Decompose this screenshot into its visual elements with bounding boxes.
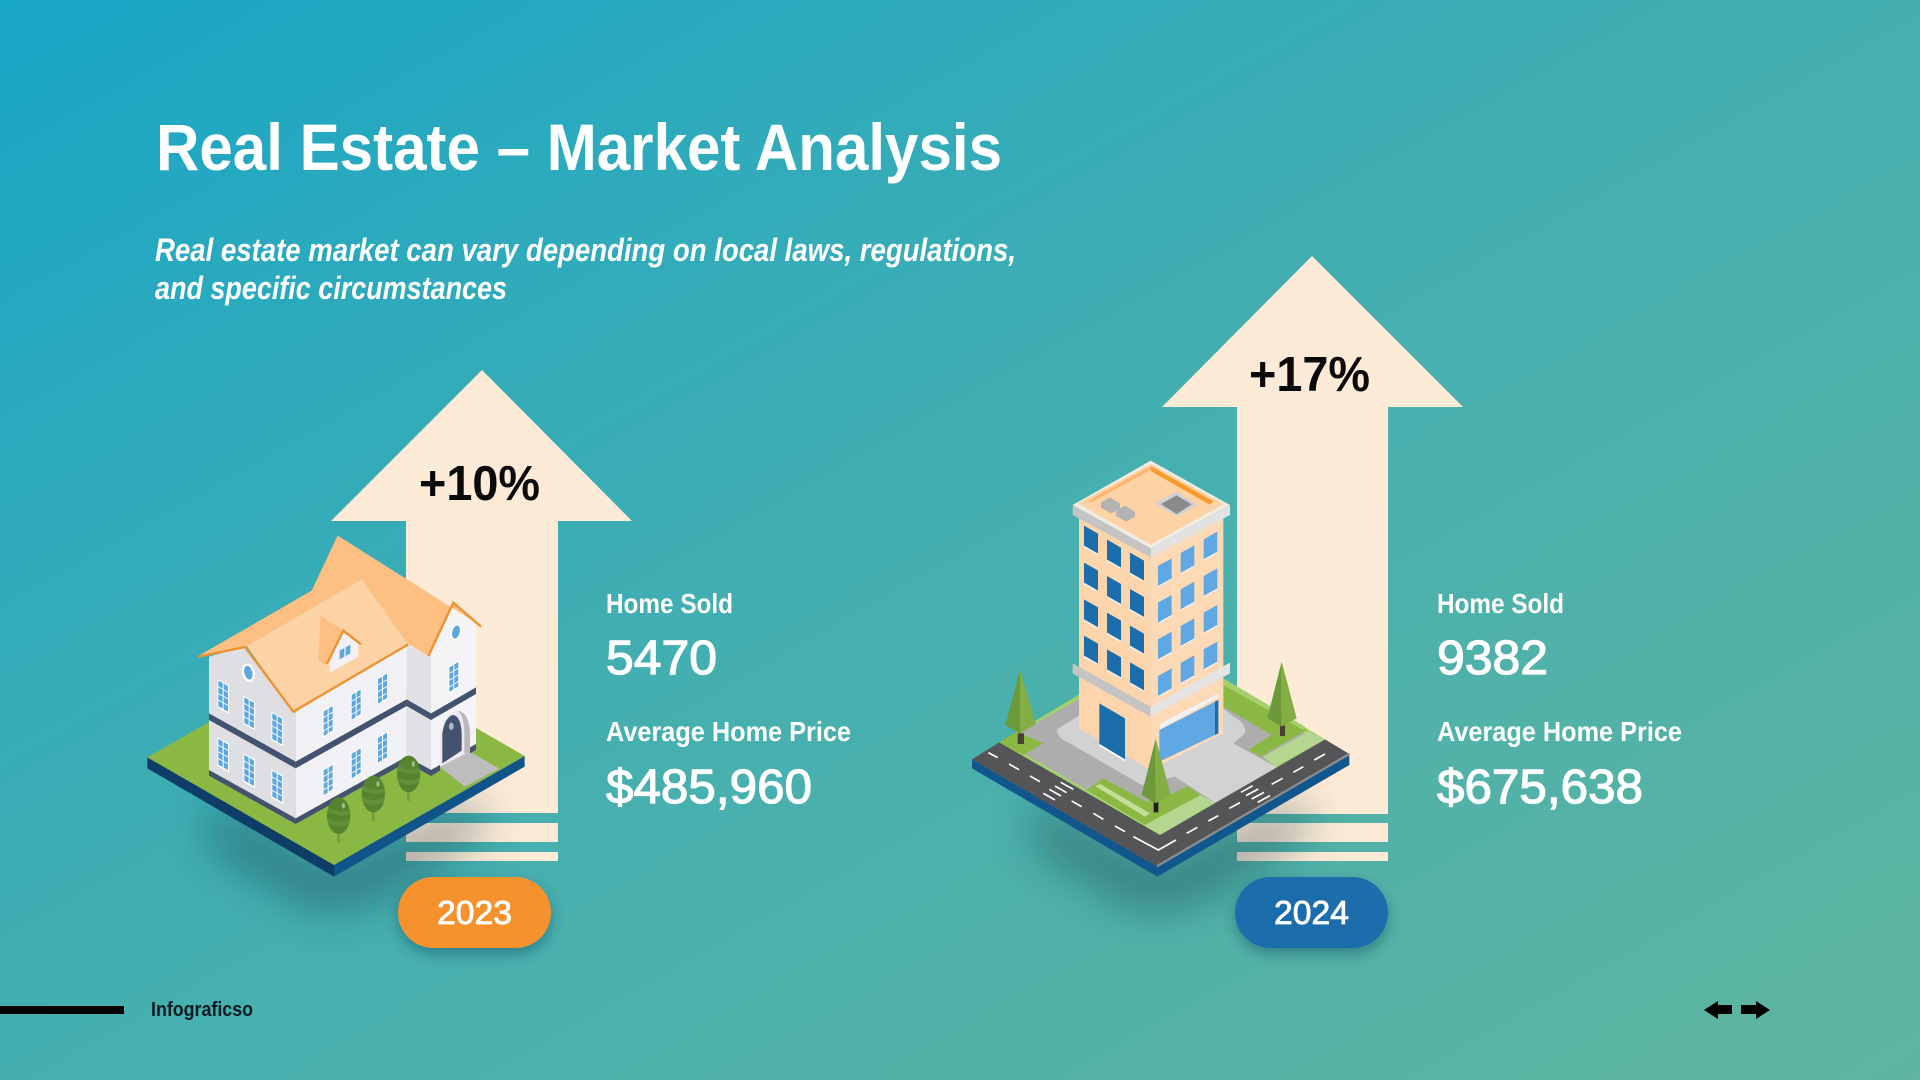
stats: 2024: Average Home Price bbox=[1437, 716, 1682, 747]
stats: 2023: Average Home Price bbox=[606, 716, 851, 747]
subtitle: Real estate market can vary depending on local laws, regulations, bbox=[155, 232, 1016, 268]
illustration: house bbox=[147, 536, 525, 877]
nav arrows bbox=[1704, 1001, 1770, 1019]
house door bbox=[440, 711, 470, 767]
arrow 2023 bbox=[331, 370, 632, 861]
subtitle: and specific circumstances bbox=[155, 270, 507, 306]
building door and shopfront bbox=[1099, 693, 1218, 762]
building trees bbox=[1005, 662, 1297, 812]
house roof bbox=[198, 536, 481, 712]
building cornices bbox=[1073, 505, 1230, 717]
arrow 2024 bbox=[1162, 256, 1463, 861]
shadow: office building bbox=[1030, 800, 1310, 910]
subtitle bbox=[155, 232, 1016, 306]
pill: 2023 bbox=[398, 877, 551, 948]
building ground and roads bbox=[972, 678, 1349, 877]
pill: 2024 bbox=[1235, 877, 1388, 948]
stats: 2023 bbox=[606, 588, 851, 814]
shadow: house bbox=[205, 800, 485, 910]
building body bbox=[1079, 515, 1223, 770]
stats: 2023: 5470 bbox=[606, 632, 717, 685]
footer bar bbox=[0, 1006, 124, 1014]
stats: 2024: Home Sold bbox=[1437, 588, 1564, 619]
stats: 2023: $485,960 bbox=[606, 761, 812, 814]
stats: 2023: Home Sold bbox=[606, 588, 733, 619]
footer brand: Infograficso bbox=[151, 999, 253, 1021]
stats: 2024 bbox=[1437, 588, 1682, 814]
title: Real Estate – Market Analysis bbox=[156, 110, 1002, 184]
pill: 2023: 2023 bbox=[437, 894, 512, 931]
stats: 2024: $675,638 bbox=[1437, 761, 1643, 814]
illustration: office building bbox=[972, 461, 1349, 877]
building roof bbox=[1073, 461, 1230, 548]
house ground bbox=[147, 648, 525, 877]
house trees bbox=[327, 756, 420, 843]
label: +10%: +10% bbox=[419, 457, 540, 511]
stats: 2024: 9382 bbox=[1437, 632, 1548, 685]
building windows bbox=[1084, 526, 1217, 697]
label: +17%: +17% bbox=[1249, 348, 1370, 402]
house windows bbox=[217, 622, 464, 804]
house walls bbox=[209, 603, 476, 824]
pill: 2024: 2024 bbox=[1274, 894, 1349, 931]
